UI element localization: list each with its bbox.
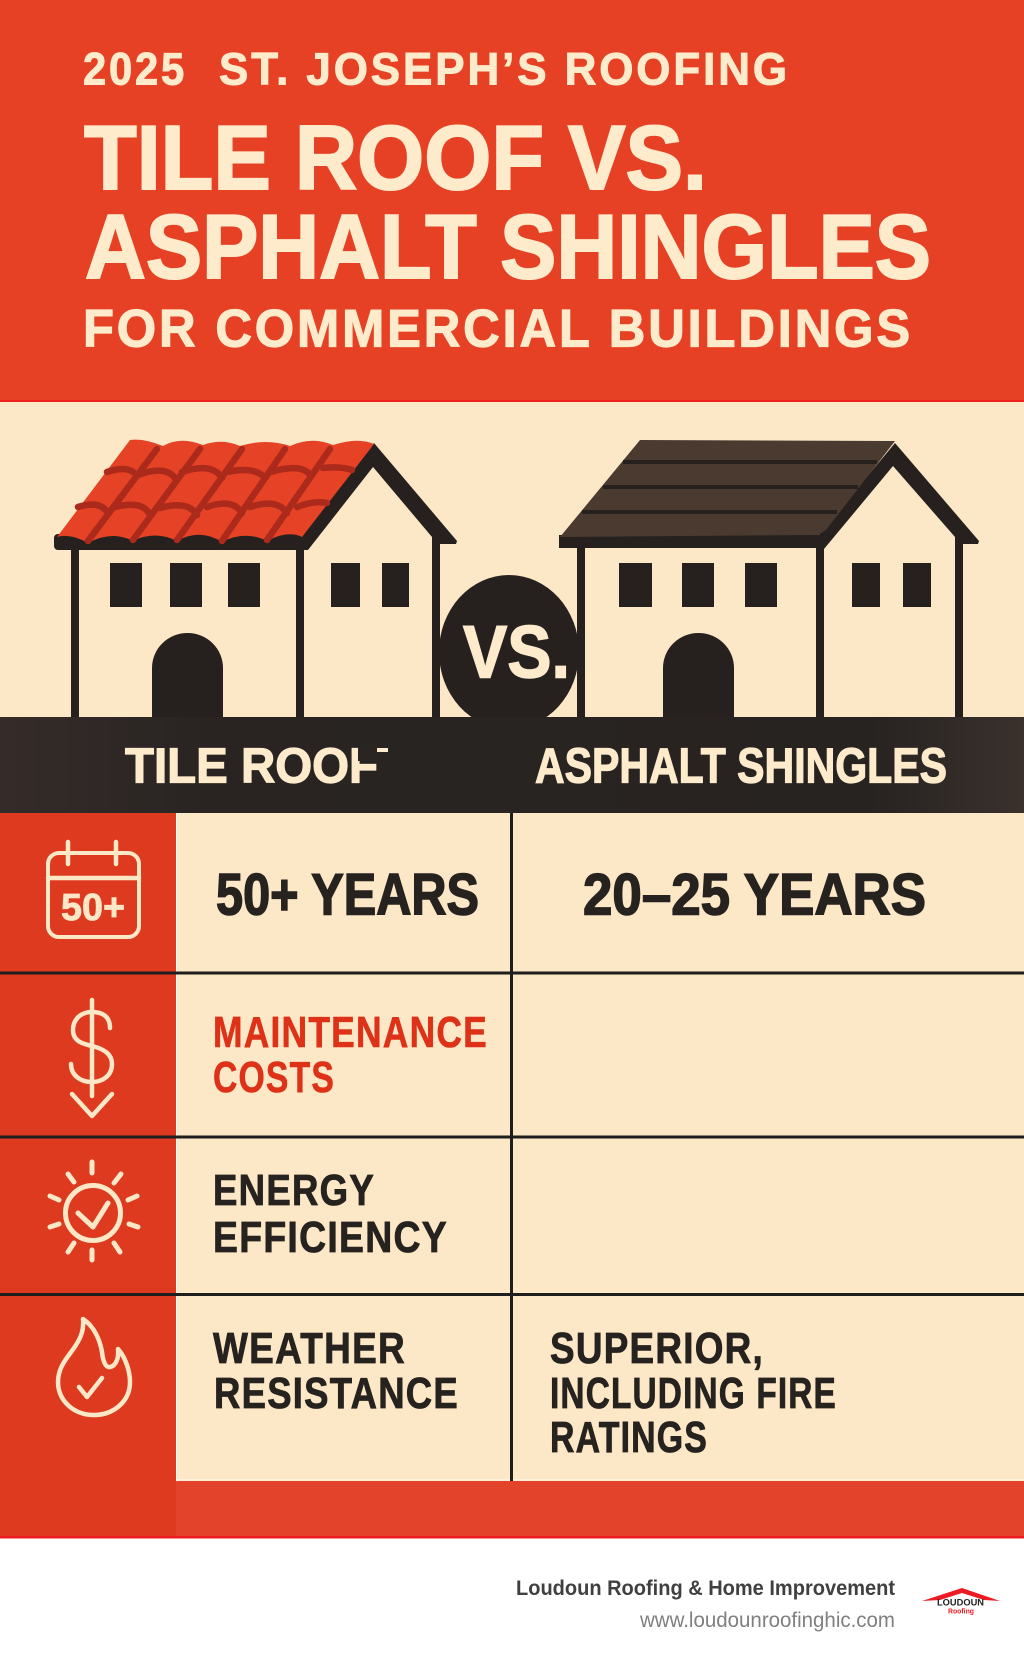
windows <box>110 563 409 607</box>
label: asphalt shingles: ASPHALT SHINGLES <box>535 740 947 794</box>
door <box>152 633 223 718</box>
text: maintenance costs: MAINTENANCE <box>213 1008 488 1057</box>
text: maintenance costs: COSTS <box>213 1053 335 1102</box>
comparison table <box>0 813 1024 1538</box>
row: lifespan <box>48 842 926 937</box>
heading: year and company: ST. JOSEPH’S ROOFING <box>219 44 790 94</box>
website: www.loudounroofinghic.com <box>639 1609 895 1632</box>
illustration: asphalt shingle house <box>559 440 979 718</box>
illustration: tile roof house <box>54 440 457 718</box>
text: energy efficiency: EFFICIENCY <box>213 1213 448 1262</box>
logo: LOUDOUN <box>937 1598 984 1608</box>
door <box>663 633 734 718</box>
windows <box>619 563 931 607</box>
icon: dollar down arrow <box>71 1000 112 1116</box>
title: TILE ROOF VS. <box>84 108 707 209</box>
icon: calendar 50+ <box>48 842 139 937</box>
text: tile lifespan: 50+ YEARS <box>216 862 479 928</box>
title: ASPHALT SHINGLES <box>85 197 931 298</box>
heading: year and company: 2025 <box>83 44 187 94</box>
text: asphalt lifespan: 20–25 YEARS <box>583 862 926 928</box>
bottom red band <box>0 1481 1024 1538</box>
logo: Roofing <box>948 1606 974 1616</box>
subtitle: FOR COMMERCIAL BUILDINGS <box>83 300 913 358</box>
text: weather resistance <box>213 1324 459 1418</box>
comparison header band <box>0 717 1024 813</box>
tile roof <box>57 440 374 543</box>
icon: flame with check <box>58 1319 130 1415</box>
shingle roof <box>560 440 895 537</box>
text: superior including fire ratings: SUPERIOR, <box>550 1324 764 1373</box>
icon column <box>0 813 176 1536</box>
text: energy efficiency <box>213 1166 448 1262</box>
text: superior including fire ratings: INCLUDING FIRE <box>550 1369 837 1418</box>
VS label: VS. <box>463 610 570 694</box>
title <box>84 108 931 298</box>
company name: Loudoun Roofing & Home Improvement <box>516 1577 895 1600</box>
footer <box>516 1577 1000 1632</box>
VS badge background <box>439 575 579 729</box>
text: weather resistance: RESISTANCE <box>214 1369 459 1418</box>
row: energy efficiency <box>50 1162 448 1262</box>
icon: calendar 50+: 50+ <box>61 887 125 929</box>
header panel <box>0 0 1024 402</box>
text: superior including fire ratings <box>550 1324 837 1462</box>
text: maintenance costs <box>213 1008 488 1102</box>
text: energy efficiency: ENERGY <box>213 1166 375 1215</box>
row: weather resistance <box>58 1319 837 1462</box>
logo <box>922 1588 1000 1616</box>
label: tile roof: TILE ROOF <box>125 740 378 794</box>
text: superior including fire ratings: RATINGS <box>550 1413 708 1462</box>
text: weather resistance: WEATHER <box>213 1324 406 1373</box>
illustration panel background <box>0 402 1024 718</box>
icon: sun with check <box>50 1162 138 1260</box>
row: maintenance costs <box>71 1000 488 1116</box>
